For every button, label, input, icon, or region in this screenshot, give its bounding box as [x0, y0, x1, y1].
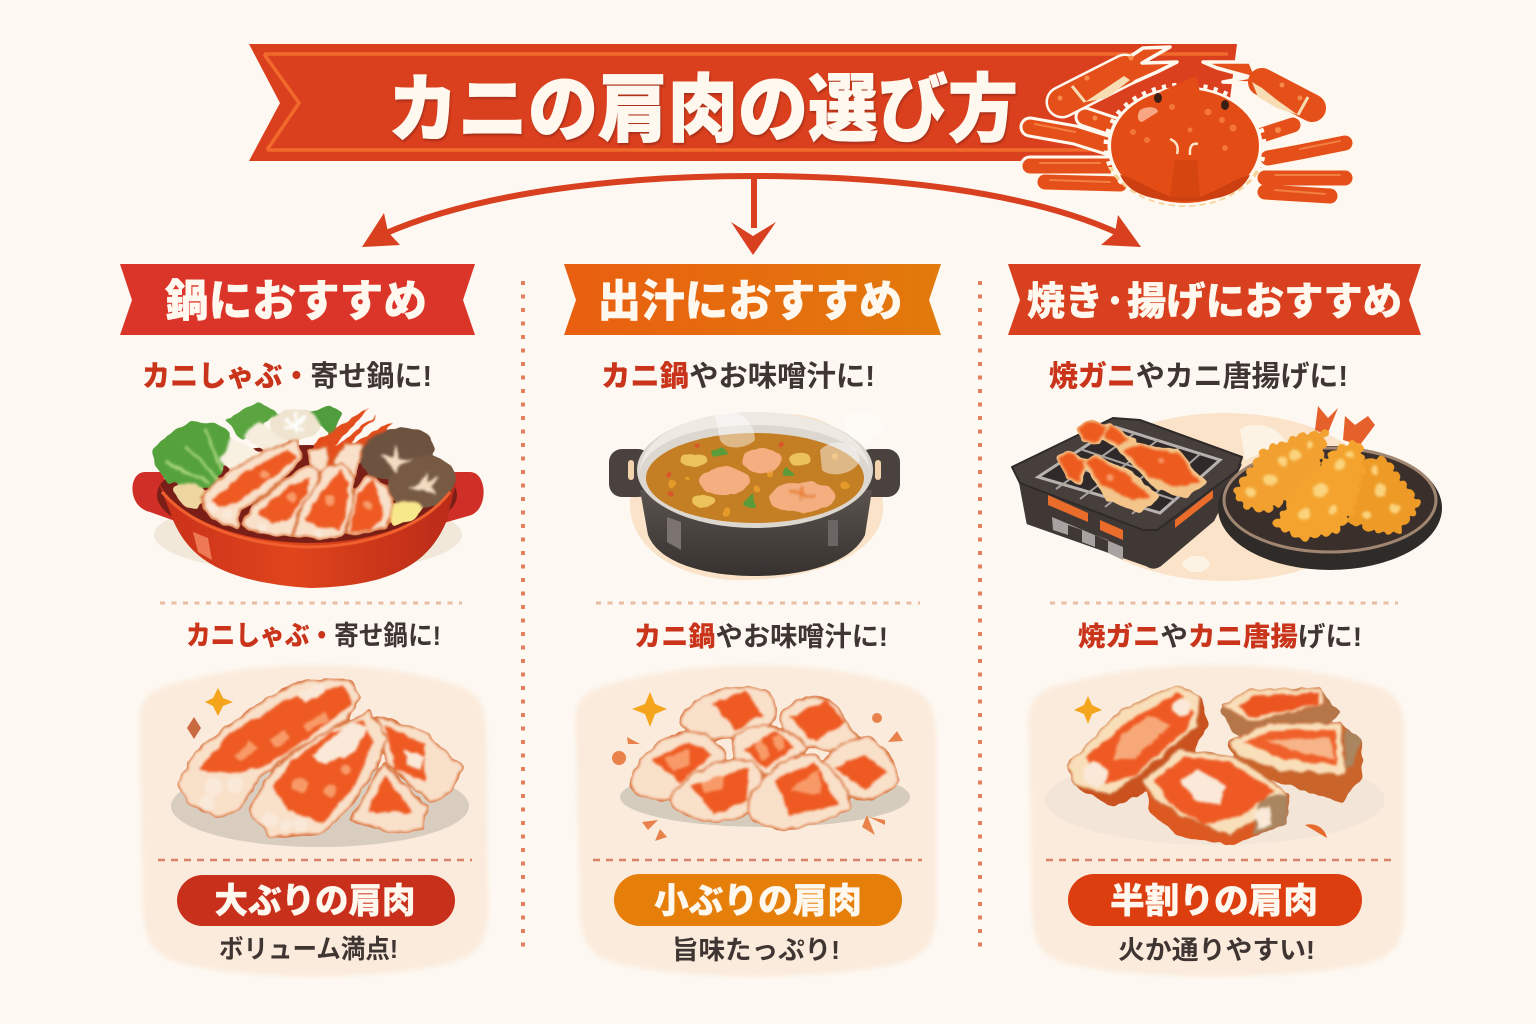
crab shell: [1108, 167, 1262, 207]
pill label: [614, 874, 902, 926]
card: small shoulder meat: [576, 665, 936, 976]
crab claws: [1058, 47, 1312, 133]
heading ribbon: dashi: [564, 264, 941, 335]
heading ribbon: dashi: 出汁におすすめ: [598, 277, 902, 326]
pill label: 小ぶりの肩肉: [654, 882, 862, 921]
illustration: grill and fried shrimp: [1012, 406, 1442, 581]
pill label: [177, 875, 455, 926]
sub caption: 焼ガニやカニ唐揚げに!: [1078, 622, 1362, 652]
pot handles: [609, 449, 651, 497]
illustration: dark pot with soup: [609, 411, 900, 580]
pill label: 半割りの肩肉: [1110, 882, 1318, 921]
icon: snow crab: [1030, 47, 1345, 207]
icon: sparkle and accents: [632, 692, 667, 727]
pot ingredients: [153, 402, 462, 538]
illustration: large crab pieces: [171, 680, 469, 847]
card: halved shoulder meat: [1029, 665, 1404, 976]
crab legs: [1030, 117, 1345, 196]
illustration: red hot pot with crab: [132, 402, 484, 588]
heading ribbon: nabe: 鍋におすすめ: [165, 277, 427, 326]
illustration: halved crab pieces: [1045, 685, 1385, 845]
title text: カニの肩肉の選び方: [388, 68, 1018, 151]
grilled crab legs: [1057, 420, 1207, 513]
caption: 火か通りやすい!: [1118, 935, 1315, 965]
column 1: for hot pot: [120, 264, 488, 976]
heading ribbon: yaki and age: 揚げにおすすめ: [1127, 281, 1402, 324]
column 3: for grilling and frying: [1008, 264, 1442, 976]
sub caption: カニ鍋やお味噌汁に!: [634, 622, 888, 652]
plate: [1218, 446, 1442, 570]
icon: sparkles: [205, 688, 233, 716]
subheading: カニ鍋やお味噌汁に!: [601, 360, 875, 393]
column separators: [523, 281, 980, 952]
dashed divider: [1050, 602, 1398, 604]
heading ribbon: nabe: [120, 264, 475, 335]
grill: [1012, 418, 1242, 567]
column 2: for broth: [564, 264, 941, 976]
fried shrimp: [1238, 406, 1417, 537]
dashed divider: [160, 602, 462, 604]
caption: ボリューム満点!: [219, 934, 398, 964]
steam: [715, 411, 883, 474]
heading ribbon: yaki and age: ・: [1101, 286, 1129, 319]
pot body: [640, 490, 872, 576]
title banner: [249, 44, 1237, 161]
subheading: カニしゃぶ・寄せ鍋に!: [142, 360, 432, 393]
dashed divider: [596, 602, 920, 604]
caption: 旨味たっぷり!: [672, 935, 840, 965]
heading ribbon: yaki and age: [1008, 264, 1421, 335]
soup ingredients: [666, 442, 849, 516]
pill label: 大ぶりの肩肉: [214, 882, 416, 921]
card: large shoulder meat: [140, 665, 488, 976]
sub caption: カニしゃぶ・寄せ鍋に!: [186, 621, 441, 651]
subheading: 焼ガニやカニ唐揚げに!: [1049, 360, 1348, 393]
pot front: [157, 478, 457, 588]
rim and glass lid: [637, 412, 873, 528]
pill label: [1068, 874, 1362, 926]
illustration: small crab chunks: [620, 687, 910, 829]
heading ribbon: yaki and age: 焼き: [1027, 281, 1103, 324]
arrows from title to three columns: [362, 176, 1141, 255]
icon: sparkle: [1074, 696, 1102, 724]
